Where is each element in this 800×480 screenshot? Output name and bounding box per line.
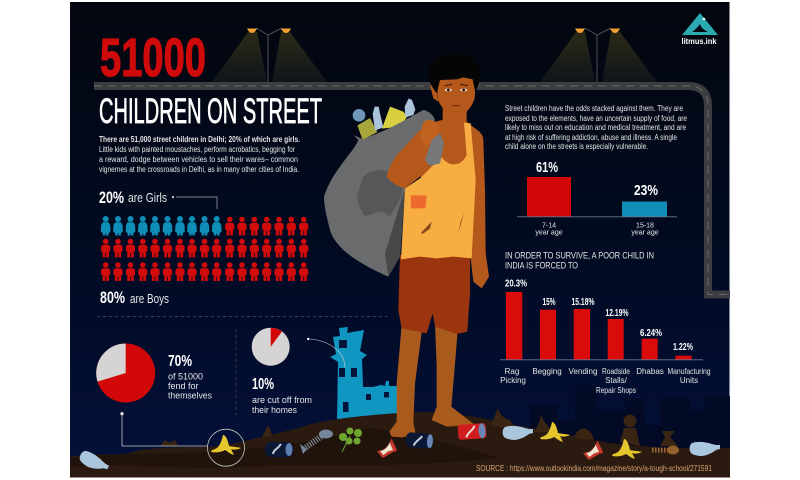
stat: 20% are girls (99, 188, 167, 207)
icon: crushed can red (458, 423, 487, 440)
tank top (401, 123, 476, 259)
text block: intro (99, 135, 300, 174)
text: 10% are cut off from their homes: 10% (252, 376, 274, 393)
bar chart: survival jobs: 15% (542, 297, 556, 308)
skyline silhouette (530, 385, 730, 450)
icon: banana peel 3 (612, 439, 642, 459)
text: 70% of 51000 fend for themselves: fend for (168, 381, 199, 391)
icon: fish bone brown (652, 446, 679, 454)
ground (70, 412, 730, 478)
title: 51000: 51000 (100, 28, 206, 88)
sack twist (425, 133, 444, 166)
stat: 80% are boys: 80% (100, 288, 125, 307)
text block: intro: a reward, dodge between vehicles to sell their wares– common (99, 155, 298, 164)
bar chart: survival jobs: 12.19% (606, 308, 629, 319)
icon: bottle left (77, 449, 111, 475)
stat: 80% are boys: are Boys (130, 291, 169, 306)
text block: odds stacked: child alone on the streets is especially vulnerable. (505, 142, 648, 151)
sack contents (324, 98, 435, 277)
boy with sack (324, 53, 489, 437)
bar chart: survival jobs: Begging (532, 367, 562, 376)
background rubbish silhouettes (160, 408, 678, 446)
text: 10% are cut off from their homes: are cut off from (252, 395, 312, 405)
pie chart: 70% (96, 344, 155, 402)
pie chart: 10% (252, 328, 290, 366)
bar chart: age groups: 61% (536, 159, 558, 176)
body (387, 53, 489, 288)
text block: intro: vignemes at the crossroads in Delhi, as in many other cities of India. (99, 165, 299, 174)
ground: darker mound (70, 428, 500, 468)
text: 70% of 51000 fend for themselves: themselves (168, 390, 212, 400)
leader line: homes (307, 338, 345, 368)
heading: in order to survive: IN ORDER TO SURVIVE, A POOR CHILD IN (505, 250, 654, 262)
icon: crushed can navy 2 (405, 432, 433, 449)
bar chart: survival jobs: Dhabas (636, 367, 664, 376)
icon: apple core 2 (583, 440, 603, 460)
head (437, 77, 476, 117)
bar chart: age groups (517, 159, 677, 236)
text: 10% are cut off from their homes: their homes (252, 405, 297, 415)
icon: bottle right (690, 442, 720, 456)
bar chart: age groups: 7-14 (542, 222, 556, 230)
bar chart: age groups: year age (631, 230, 659, 236)
shorts (398, 255, 470, 334)
leader line and circle: banana (121, 412, 244, 466)
stat: 80% are boys (100, 288, 169, 307)
icon: crushed can navy (265, 442, 293, 457)
icon: ruined blue building (330, 327, 398, 420)
text: 70% of 51000 fend for themselves: 70% (168, 353, 192, 370)
icon: right street lamps (540, 28, 657, 82)
logo: litmus.ink (682, 13, 718, 46)
icon: bottle (503, 426, 533, 440)
text: 70% of 51000 fend for themselves (168, 353, 212, 400)
bar chart: age groups: 23% (634, 182, 658, 199)
logo: litmus.ink: litmus.ink (682, 37, 717, 46)
icon: fish bone (300, 430, 333, 454)
bar chart: survival jobs: Units (680, 376, 698, 385)
icon: apple core (377, 438, 397, 458)
title: children on street: CHILDREN ON STREET (99, 92, 322, 131)
text block: intro: There are 51,000 street children in Delhi; 20% of which are girls. (99, 135, 300, 144)
bar chart: survival jobs: 15.18% (572, 297, 595, 308)
sack (324, 110, 435, 277)
source: SOURCE : https://www.outlookindia.com/magazine/story/a-tough-school/271591 (476, 464, 712, 473)
stat: 20% are girls: 20% (99, 188, 124, 207)
heading: in order to survive (505, 250, 654, 272)
pictogram: girls and boys (101, 216, 308, 281)
text block: odds stacked: at high risk of suffering addiction, abuse and illness. A single (505, 133, 677, 142)
road (94, 86, 730, 294)
icon: green plant (339, 428, 362, 452)
heading: in order to survive: INDIA IS FORCED TO (505, 260, 578, 272)
bar chart: survival jobs: Picking (500, 376, 526, 385)
bar chart: survival jobs: Roadside (602, 367, 630, 376)
bar chart: survival jobs: Repair Shops (596, 386, 636, 395)
leader line: girls (172, 196, 217, 209)
legs (389, 323, 475, 437)
bar chart: survival jobs (500, 278, 710, 395)
text: 70% of 51000 fend for themselves: of 51000 (168, 372, 203, 382)
icon: banana peel (211, 435, 241, 455)
bar chart: age groups: year age (535, 230, 563, 236)
stat: 20% are girls: are Girls (128, 190, 167, 205)
text: 10% are cut off from their homes (252, 376, 312, 415)
bar chart: survival jobs: Stalls/ (605, 376, 628, 385)
text block: odds stacked: likely to miss out on education and medical treatment, and are (505, 123, 686, 132)
bar chart: survival jobs: 20.3% (505, 278, 527, 290)
text block: odds stacked: Street children have the odds stacked against them. They are (505, 104, 683, 113)
icon: banana peel 2 (540, 422, 570, 442)
bar chart: survival jobs: Manufacturing (668, 367, 710, 376)
bar chart: survival jobs: Vending (569, 367, 597, 376)
bar chart: survival jobs: Rag (505, 367, 519, 376)
icon: left street lamps (212, 28, 327, 82)
text block: odds stacked (505, 104, 687, 151)
text block: intro: Little kids with painted moustaches, perform acrobatics, begging for (99, 145, 295, 154)
bar chart: survival jobs: 6.24% (640, 328, 662, 339)
bar chart: survival jobs: 1.22% (673, 342, 693, 353)
text block: odds stacked: exposed to the elements, have an uncertain supply of food, are (505, 114, 687, 123)
bar chart: age groups: 15-18 (636, 222, 654, 230)
